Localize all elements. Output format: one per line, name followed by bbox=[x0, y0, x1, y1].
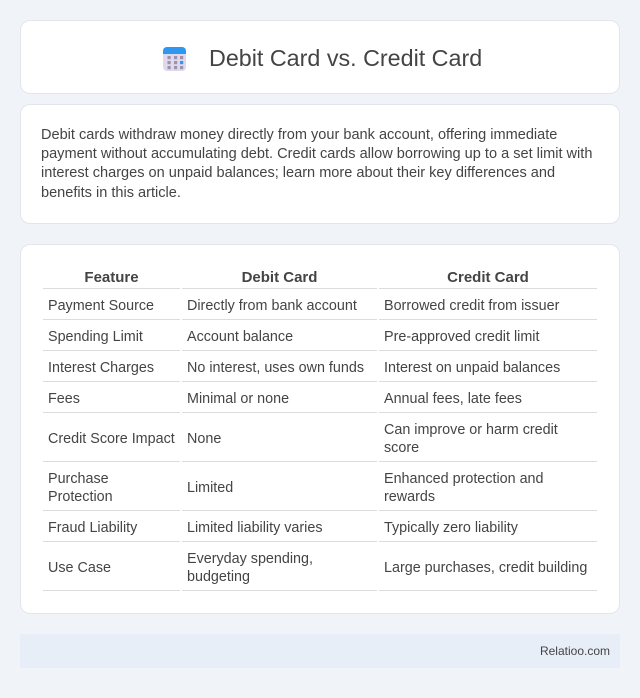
comparison table: Account balance bbox=[187, 329, 293, 345]
comparison table: Fees bbox=[48, 391, 80, 407]
comparison table: Spending Limit bbox=[48, 329, 143, 345]
comparison table: Typically zero liability bbox=[384, 520, 518, 536]
title: Debit Card vs. Credit Card bbox=[209, 45, 482, 71]
comparison table: Limited liability varies bbox=[187, 520, 323, 536]
text block: introduction: interest charges on unpaid balances; learn more about their key differences and bbox=[41, 165, 555, 181]
comparison table: Annual fees, late fees bbox=[384, 391, 522, 407]
comparison table: Interest on unpaid balances bbox=[384, 360, 560, 376]
comparison table: None bbox=[187, 431, 221, 447]
comparison table: Large purchases, credit building bbox=[384, 560, 587, 576]
comparison table: Pre-approved credit limit bbox=[384, 329, 539, 345]
comparison table: Directly from bank account bbox=[187, 298, 357, 314]
comparison table: Protection bbox=[48, 489, 113, 505]
comparison table: rewards bbox=[384, 489, 435, 505]
panel: title header bbox=[20, 20, 620, 94]
comparison table: Feature bbox=[84, 268, 139, 286]
comparison table: Can improve or harm credit bbox=[384, 422, 558, 438]
comparison table bbox=[43, 268, 597, 591]
comparison table: score bbox=[384, 440, 419, 456]
text block: introduction: benefits in this article. bbox=[41, 185, 181, 201]
comparison table: Payment Source bbox=[48, 298, 154, 314]
text block: introduction: payment without accumulating debt. Credit cards allow borrowing up to a set limit with bbox=[41, 146, 592, 162]
text block: introduction: Debit cards withdraw money directly from your bank account, offering immediate bbox=[41, 126, 557, 142]
comparison table: budgeting bbox=[187, 569, 250, 585]
comparison table: Minimal or none bbox=[187, 391, 289, 407]
footer bbox=[20, 634, 620, 668]
panel: introduction bbox=[20, 104, 620, 224]
comparison table: Debit Card bbox=[242, 268, 317, 286]
comparison table: Purchase bbox=[48, 471, 109, 487]
icon: calendar bbox=[163, 47, 186, 71]
comparison table: Enhanced protection and bbox=[384, 471, 544, 487]
comparison table: Fraud Liability bbox=[48, 520, 137, 536]
text block: introduction bbox=[41, 126, 592, 201]
panel: comparison table bbox=[20, 244, 620, 614]
comparison table: Interest Charges bbox=[48, 360, 154, 376]
comparison table: Credit Score Impact bbox=[48, 431, 175, 447]
comparison table: Borrowed credit from issuer bbox=[384, 298, 559, 314]
comparison table: No interest, uses own funds bbox=[187, 360, 364, 376]
comparison table: Credit Card bbox=[447, 268, 529, 286]
footer credit: Relatioo.com bbox=[540, 644, 610, 658]
comparison table: Use Case bbox=[48, 560, 111, 576]
comparison table: Everyday spending, bbox=[187, 551, 313, 567]
comparison table: Limited bbox=[187, 480, 233, 496]
